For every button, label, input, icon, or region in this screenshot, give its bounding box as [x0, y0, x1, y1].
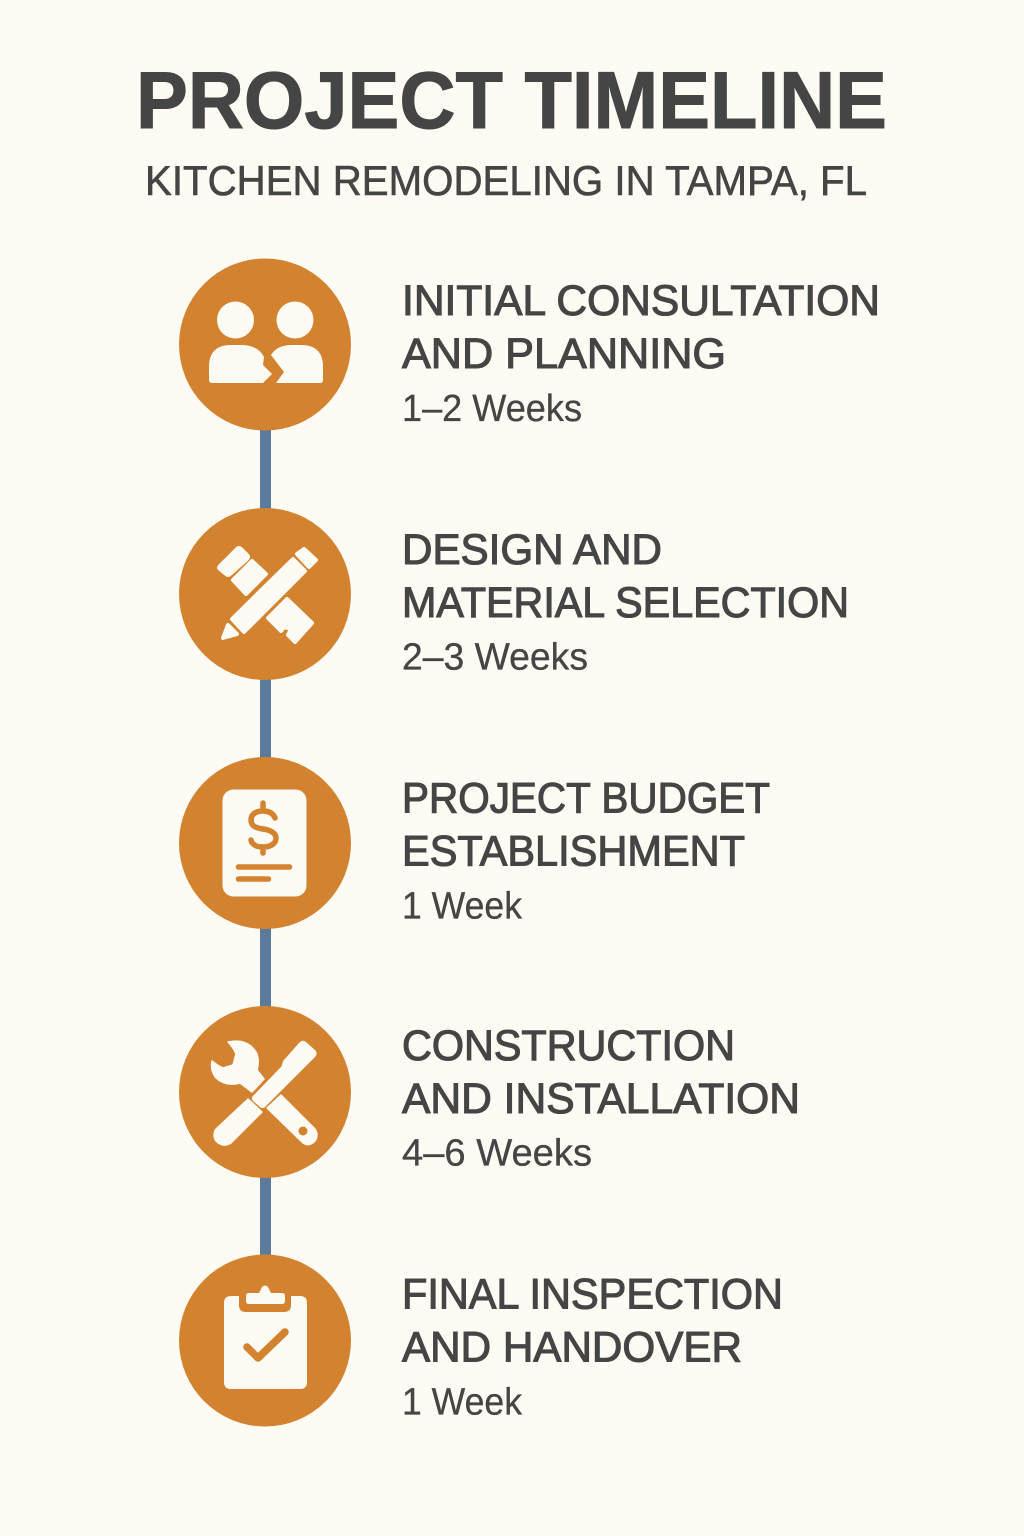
step 4 heading line 2: AND INSTALLATION	[402, 1075, 800, 1123]
icon: two people in consultation	[179, 258, 351, 430]
step 1 heading: INITIAL CONSULTATION	[402, 277, 880, 325]
step 4 heading: CONSTRUCTION	[402, 1022, 735, 1070]
step 1 duration: 1–2 Weeks	[402, 388, 582, 430]
step 3 heading line 2: ESTABLISHMENT	[402, 828, 745, 876]
step 4 duration: 4–6 Weeks	[402, 1132, 592, 1174]
panel: step 3	[179, 757, 770, 929]
icon: clipboard with check mark	[179, 1254, 351, 1426]
panel: step 2	[179, 508, 849, 680]
step 5 heading: FINAL INSPECTION	[402, 1270, 783, 1318]
step 2 heading line 2: MATERIAL SELECTION	[402, 579, 849, 627]
step 2 heading: DESIGN AND	[402, 526, 662, 574]
panel: step 4	[179, 1006, 800, 1178]
step 3 heading: PROJECT BUDGET	[402, 774, 770, 822]
step 5 heading line 2: AND HANDOVER	[402, 1324, 742, 1372]
step 5 duration: 1 Week	[402, 1382, 523, 1424]
subtitle: KITCHEN REMODELING IN TAMPA, FL	[145, 157, 867, 204]
step 1 heading line 2: AND PLANNING	[402, 330, 726, 378]
title: PROJECT TIMELINE	[136, 56, 887, 146]
panel: step 5	[179, 1254, 783, 1426]
icon: wrench and screwdriver	[179, 1006, 351, 1178]
step 3 duration: 1 Week	[402, 886, 523, 928]
icon: budget document with dollar sign	[179, 757, 351, 929]
icon: pencil and ruler	[179, 508, 351, 680]
connector lines	[260, 425, 271, 1263]
panel: step 1	[179, 258, 880, 430]
step 2 duration: 2–3 Weeks	[402, 636, 588, 678]
